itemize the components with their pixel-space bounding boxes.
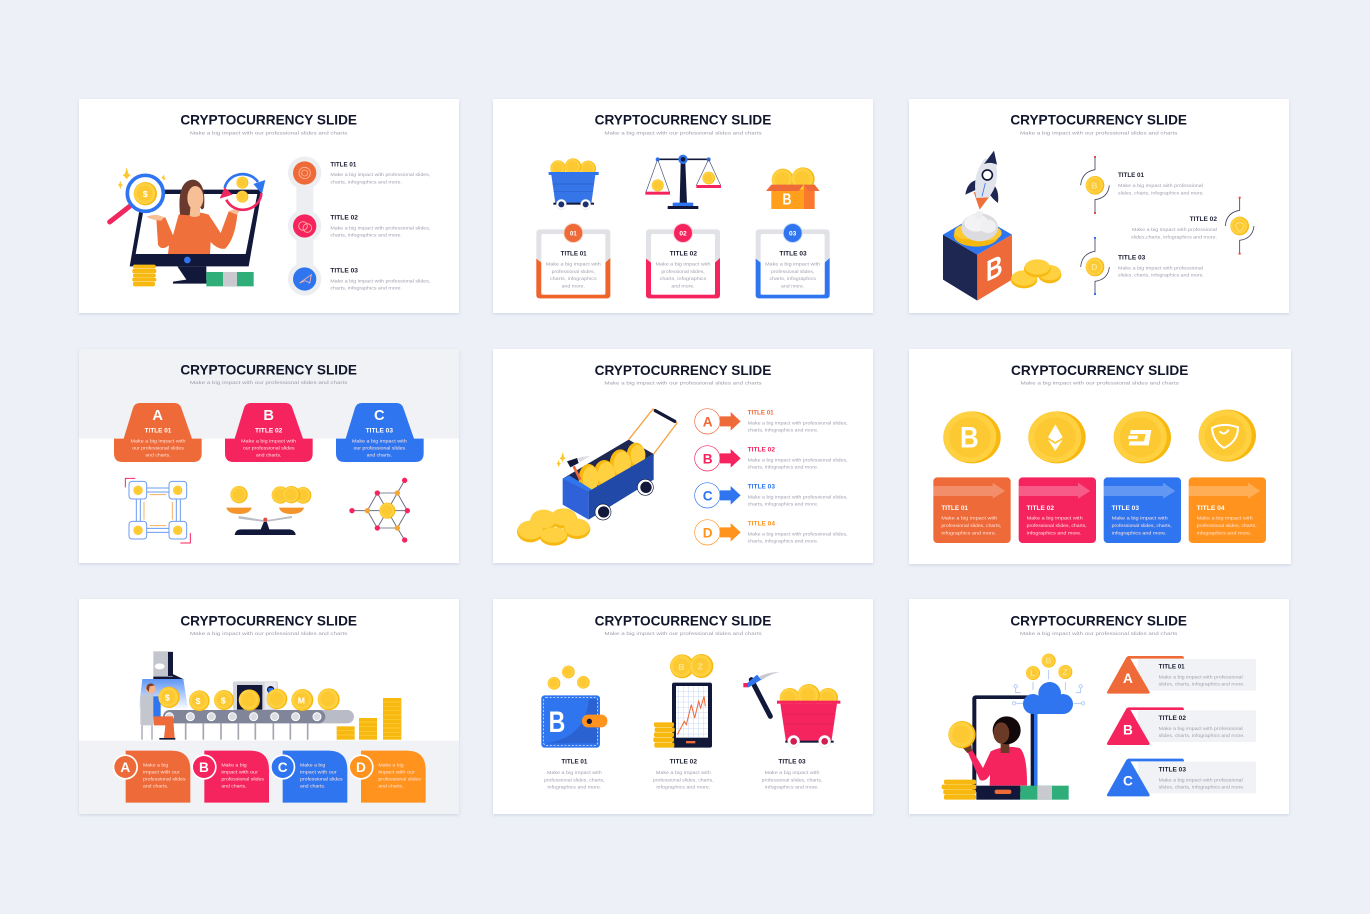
icon: bitcoin coin (943, 411, 1001, 463)
card 02: professional slides, (661, 269, 705, 275)
card 03: professional slides, charts, (1112, 523, 1172, 529)
timeline connector (288, 156, 321, 296)
icon: phone chart with coins: Z (698, 662, 704, 672)
text block: title 02: Make a big impact with (656, 770, 711, 776)
list item C: Make a big impact with professional slides, (748, 494, 848, 500)
text block: title 02: TITLE 02 (670, 759, 697, 766)
panel: slide 2 cart scale box (493, 99, 873, 313)
text block: title 03: slides, charts, infographics and more. (1118, 273, 1204, 279)
item A: slides, charts, infographics and more. (1159, 682, 1245, 688)
text block: title 02 (330, 215, 430, 239)
badge C: Make a big impact with (352, 438, 407, 444)
icon: rocket (965, 151, 998, 210)
icon: dash coin (1114, 411, 1171, 463)
subtitle: Make a big impact with our professional slides and charts (190, 130, 348, 136)
list item C (695, 483, 848, 508)
subtitle: Make a big impact with our professional slides and charts (190, 631, 348, 637)
badge C: and charts. (367, 452, 392, 458)
card D: and charts. (378, 784, 404, 790)
title: CRYPTOCURRENCY SLIDE (1011, 362, 1188, 378)
card C: and charts. (300, 784, 325, 790)
card B (191, 751, 269, 803)
list item C: C (703, 488, 713, 503)
text block: title 02: TITLE 02 (330, 215, 358, 222)
card 03: Make a big impact with (765, 262, 820, 268)
text block: title 01 (544, 759, 605, 790)
item B: TITLE 02 (1159, 715, 1186, 722)
card 03: Make a big impact with (1112, 516, 1168, 522)
illustration: conveyor machine: $ (221, 695, 226, 705)
item B (1107, 707, 1256, 745)
icon: refresh cycle with coins (220, 174, 265, 210)
item C: C (1123, 774, 1133, 789)
panel: slide 1 laptop investor (79, 99, 459, 313)
card A: Make a big (143, 762, 169, 768)
list item D: Make a big impact with professional slides, (748, 531, 848, 537)
text block: title 01: infographics and more. (547, 784, 601, 790)
icon: wallet: B (549, 706, 565, 739)
card 04: TITLE 04 (1197, 505, 1225, 512)
list item A: Make a big impact with professional slides, (748, 420, 848, 426)
card 01: and more. (562, 283, 585, 289)
card 01 (536, 223, 610, 298)
card A: A (120, 760, 130, 775)
text block: title 01: charts, infographics and more. (330, 179, 402, 185)
title: CRYPTOCURRENCY SLIDE (180, 112, 357, 128)
text block: title 01: TITLE 01 (561, 759, 588, 766)
card 02: 02 (679, 230, 687, 237)
text block: title 01: slides, charts, infographics and more. (1118, 190, 1204, 196)
icon: ethereum coin (1028, 411, 1086, 463)
timeline node 01: B (1091, 180, 1097, 190)
text block: title 01 (330, 161, 430, 185)
icon: cloud with coins: B (1045, 656, 1051, 666)
card D (348, 751, 426, 803)
card 03: TITLE 03 (779, 250, 807, 257)
icon: box of coins (766, 167, 820, 209)
list item D: charts, infographics and more. (748, 539, 818, 545)
card 02: professional slides, charts, (1027, 523, 1087, 529)
illustration: isometric cube with coins: B (986, 248, 1003, 289)
card 03: 03 (789, 230, 797, 237)
subtitle: Make a big impact with our professional slides and charts (604, 631, 762, 637)
text block: title 02 (1131, 216, 1217, 240)
card 01: 01 (570, 230, 577, 237)
title: CRYPTOCURRENCY SLIDE (180, 612, 357, 628)
list item C: TITLE 03 (748, 484, 775, 491)
list item A: A (703, 414, 713, 429)
text block: title 02: charts, infographics and more. (330, 233, 402, 239)
illustration: isometric cart of coins (556, 409, 677, 520)
text block: title 03: professional slides, charts, (762, 777, 822, 783)
card A: and charts. (143, 784, 168, 790)
icon: network hexagon (349, 478, 410, 543)
subtitle: Make a big impact with our professional slides and charts (190, 380, 348, 386)
item A (1107, 656, 1256, 694)
illustration: coin pile (517, 508, 590, 546)
panel: slide 4 three badges (79, 349, 459, 563)
subtitle: Make a big impact with our professional slides and charts (604, 130, 762, 136)
card 02: charts, infographics (660, 276, 707, 282)
title: CRYPTOCURRENCY SLIDE (1010, 112, 1187, 128)
card B: Make a big (221, 762, 247, 768)
card 03: professional slides, (771, 269, 814, 275)
card C: Make a big (300, 762, 326, 768)
list item B: B (703, 451, 713, 466)
card 02: TITLE 02 (1027, 505, 1054, 512)
panel: slide 7 conveyor (79, 599, 459, 814)
badge A: our professional slides (132, 445, 184, 451)
card 03: charts, infographics (769, 276, 817, 282)
card 01: TITLE 01 (941, 505, 968, 512)
icon: magnifier with coin: $ (143, 189, 148, 199)
card 04: infographics and more. (1197, 530, 1252, 536)
list item D (695, 520, 848, 545)
text block: title 02 (653, 759, 714, 790)
icon: wallet (541, 666, 607, 748)
card 04: Make a big impact with (1197, 516, 1253, 522)
icon: balance scale (645, 155, 721, 209)
text block: title 03 (330, 268, 430, 292)
card 02: Make a big impact with (655, 262, 711, 268)
subtitle: Make a big impact with our professional slides and charts (1020, 381, 1179, 387)
list item A: charts, infographics and more. (748, 428, 818, 434)
list item B: charts, infographics and more. (748, 465, 818, 471)
item A: TITLE 01 (1159, 664, 1185, 671)
card 02 (646, 223, 720, 298)
text block: title 03: TITLE 03 (1118, 254, 1146, 261)
card 01: infographics and more. (941, 530, 996, 536)
subtitle: Make a big impact with our professional slides and charts (604, 381, 762, 387)
card C: professional slides (300, 777, 343, 783)
card 01: Make a big impact with (546, 262, 601, 268)
card D: D (356, 760, 366, 775)
icon: magnifier with coin (110, 167, 166, 222)
item B: Make a big impact with professional (1159, 726, 1243, 732)
list item A (695, 409, 848, 434)
panel: slide 9 cloud phone (909, 599, 1289, 814)
card A: professional slides (143, 777, 186, 783)
illustration: conveyor machine: M (298, 695, 305, 705)
badge B: B (263, 408, 274, 424)
text block: title 03: Make a big impact with professional slides, (330, 278, 430, 284)
text block: title 02: professional slides, charts, (653, 777, 714, 783)
text block: title 01: Make a big impact with professional slides, (330, 172, 430, 178)
illustration: conveyor machine: $ (165, 693, 170, 703)
title: CRYPTOCURRENCY SLIDE (1010, 612, 1187, 628)
badge C: TITLE 03 (366, 428, 393, 435)
icon: coin balance (226, 486, 311, 535)
card 02: Make a big impact with (1027, 516, 1083, 522)
icon: nem coin (1199, 410, 1256, 462)
text block: title 01: TITLE 01 (1118, 172, 1144, 179)
card D: Make a big (378, 762, 404, 768)
text block: title 03: Make a big impact with (764, 770, 820, 776)
list item A: TITLE 01 (748, 410, 774, 417)
card 02: TITLE 02 (670, 250, 697, 257)
card 01: professional slides, charts, (941, 523, 1001, 529)
title: CRYPTOCURRENCY SLIDE (595, 612, 771, 628)
card 03: infographics and more. (1112, 530, 1167, 536)
badge C: our professional slides (353, 445, 406, 451)
card 01: charts, infographics (550, 276, 597, 282)
timeline node 01 (1081, 156, 1109, 214)
icon: pickaxe and cart (743, 672, 840, 747)
subtitle: Make a big impact with our professional slides and charts (1020, 631, 1178, 637)
card 01: TITLE 01 (561, 250, 587, 257)
title: CRYPTOCURRENCY SLIDE (595, 362, 771, 378)
text block: title 03 (762, 759, 822, 790)
text block: title 01: Make a big impact with (547, 770, 602, 776)
illustration: woman in monitor (130, 180, 262, 286)
card 01 (933, 477, 1011, 543)
text block: title 01: TITLE 01 (330, 161, 357, 168)
card 04 (1189, 477, 1266, 543)
card 01: Make a big impact with (941, 516, 998, 522)
text block: title 03: TITLE 03 (330, 268, 358, 275)
card C: C (278, 760, 288, 775)
text block: title 02: slides,charts, infographics and more. (1131, 234, 1217, 240)
illustration: conveyor machine: $ (196, 696, 201, 706)
text block: title 03 (1118, 254, 1204, 279)
timeline node 03 (1081, 237, 1109, 295)
subtitle: Make a big impact with our professional slides and charts (1020, 130, 1178, 136)
card 03 (1104, 477, 1181, 543)
badge C: C (374, 408, 385, 424)
badge A (114, 403, 202, 462)
card D: impact with our (378, 769, 415, 775)
icon: mining cart (549, 158, 599, 209)
card D: professional slides (378, 777, 422, 783)
title: CRYPTOCURRENCY SLIDE (180, 362, 357, 378)
icon: bitcoin coin: B (960, 421, 979, 454)
icon: phone chart with coins (653, 654, 713, 748)
list item D: TITLE 04 (748, 521, 775, 528)
item A: A (1123, 671, 1133, 686)
text block: title 02: TITLE 02 (1190, 216, 1217, 223)
text block: title 03: TITLE 03 (778, 759, 806, 766)
card 03: TITLE 03 (1112, 505, 1139, 512)
badge A: A (152, 408, 163, 424)
card 02 (1019, 477, 1096, 543)
panel: slide 6 four coins (909, 349, 1291, 564)
card 03: and more. (781, 283, 804, 289)
text block: title 02: infographics and more. (656, 784, 710, 790)
card A (113, 751, 190, 803)
illustration: conveyor machine (139, 651, 401, 740)
text block: title 02: Make a big impact with professional slides, (330, 225, 430, 231)
panel: slide 5 cart list (493, 349, 873, 563)
icon: phone chart with coins: B (678, 662, 684, 672)
card B: impact with our (221, 769, 258, 775)
item C: Make a big impact with professional (1159, 777, 1243, 783)
item C: slides, charts, infographics and more. (1159, 784, 1245, 790)
panel: slide 3 rocket cube (909, 99, 1289, 313)
text block: title 01: professional slides, charts, (544, 777, 605, 783)
card 02: infographics and more. (1027, 530, 1082, 536)
illustration: phone with woman and cloud (942, 695, 1069, 800)
text block: title 03: Make a big impact with professional (1118, 265, 1203, 271)
badge A: TITLE 01 (145, 428, 172, 435)
icon: cloud with coins: L (1030, 668, 1036, 678)
card C (270, 751, 347, 803)
badge B: Make a big impact with (241, 438, 296, 444)
list item B: Make a big impact with professional slides, (748, 457, 848, 463)
badge B: and charts. (256, 452, 281, 458)
list item C: charts, infographics and more. (748, 502, 818, 508)
card B: professional slides (221, 777, 265, 783)
card C: impact with our (300, 769, 337, 775)
illustration: isometric cube with coins (943, 211, 1061, 301)
list item B: TITLE 02 (748, 447, 775, 454)
badge B: our professional slides (243, 445, 295, 451)
text block: title 03: infographics and more. (765, 784, 819, 790)
card 02: and more. (671, 283, 695, 289)
icon: cloud with coins: Z (1062, 667, 1068, 677)
text block: title 01: Make a big impact with professional (1118, 183, 1203, 189)
badge C (336, 403, 424, 462)
item C (1107, 759, 1256, 796)
card B: and charts. (221, 784, 247, 790)
badge A: and charts. (145, 452, 171, 458)
item C: TITLE 03 (1159, 766, 1186, 773)
badge B: TITLE 02 (255, 428, 283, 435)
icon: blockchain square (125, 478, 190, 543)
badge B (225, 403, 313, 462)
timeline node 03: D (1091, 262, 1097, 272)
text block: title 01 (1118, 172, 1204, 196)
item B: slides, charts, infographics and more. (1159, 733, 1245, 739)
badge A: Make a big impact with (130, 438, 186, 444)
panel: slide 8 wallet phone cart (493, 599, 873, 814)
card 03 (756, 223, 830, 298)
card A: impact with our (143, 769, 180, 775)
item B: B (1123, 722, 1133, 737)
icon: box of coins: B (782, 192, 791, 209)
card 04: professional slides, charts, (1197, 523, 1257, 529)
card B: B (199, 760, 209, 775)
text block: title 03: charts, infographics and more. (330, 286, 402, 292)
list item D: D (703, 525, 713, 540)
card 01: professional slides, (552, 269, 595, 275)
text block: title 02: Make a big impact with professional (1132, 227, 1217, 233)
item A: Make a big impact with professional (1159, 675, 1243, 681)
list item B (695, 446, 848, 471)
timeline node 02 (1225, 197, 1254, 255)
title: CRYPTOCURRENCY SLIDE (595, 112, 771, 128)
icon: cloud with coins (1012, 654, 1085, 714)
